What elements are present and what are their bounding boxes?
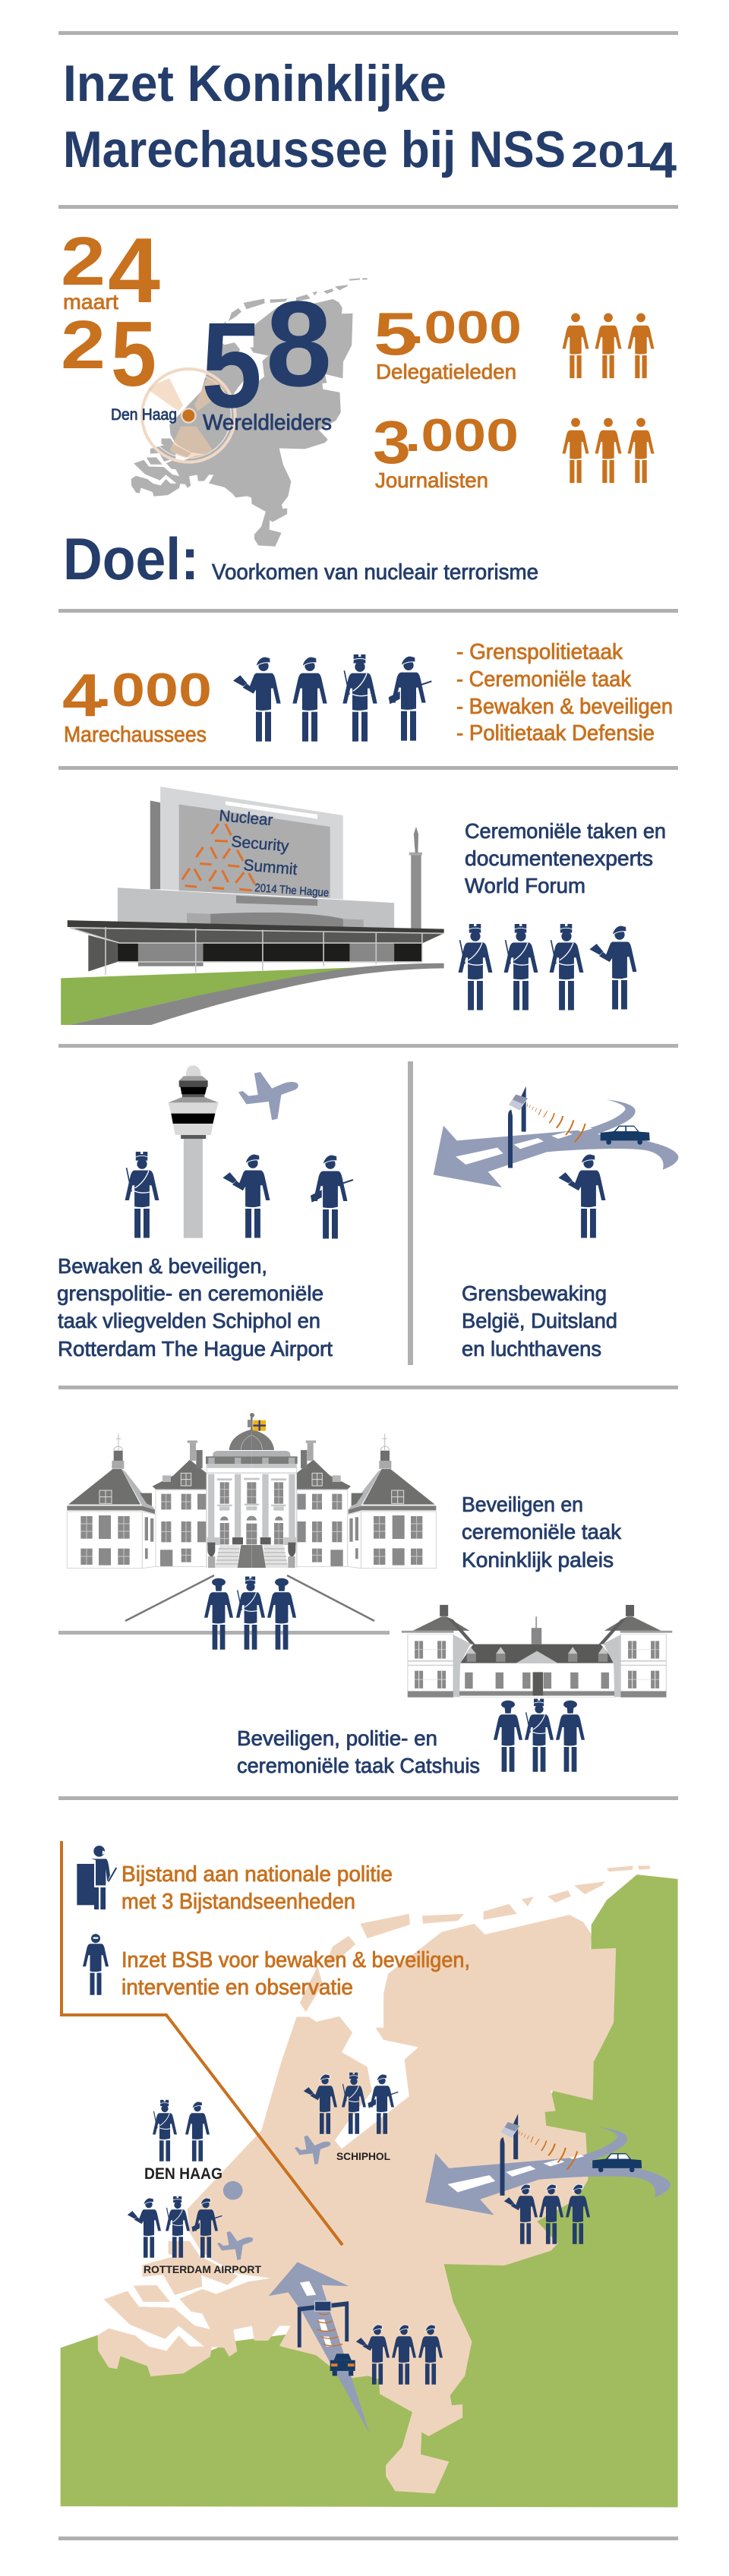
text: World Forum: documentenexperts <box>465 847 653 870</box>
text: BSB: Inzet BSB voor bewaken & beveiligen, <box>122 1948 470 1972</box>
icon: border marechaussee <box>558 1154 605 1238</box>
goal heading and text: Voorkomen van nucleair terrorisme <box>212 560 538 585</box>
dates: 4 <box>108 219 160 322</box>
task list: - Politietaak Defensie <box>456 721 655 746</box>
dates <box>61 219 160 405</box>
stat: 4.000 Marechaussees: Marechaussees <box>64 723 207 747</box>
stat: journalisten: 3 <box>373 408 411 476</box>
illustration: control tower <box>169 1065 219 1238</box>
map: Netherlands grey with radiation symbol <box>131 278 368 547</box>
icon: four marechaussees <box>233 654 431 742</box>
text: airports: taak vliegvelden Schiphol en <box>58 1309 320 1332</box>
icon: car front <box>330 2354 355 2376</box>
group: Den Haag <box>144 2100 222 2183</box>
logo text: Nuclear Security Summit: 2014 The Hague <box>254 881 330 900</box>
icon: plane <box>238 1072 298 1120</box>
stat: delegatieleden: 5 <box>374 300 418 367</box>
text: BSB: interventie en observatie <box>122 1975 353 2000</box>
illustration: Catshuis <box>402 1605 672 1698</box>
label: Den Haag: Den Haag <box>111 406 177 424</box>
task list: - Ceremoniële taak <box>456 667 631 692</box>
goal heading and text <box>63 525 538 592</box>
stat: 4.000 Marechaussees: 4 <box>62 661 103 729</box>
icon: airport marechaussees <box>125 1152 353 1239</box>
icon: eastern border marechaussees <box>504 2184 590 2244</box>
icon: royal flag <box>253 1420 266 1431</box>
title: 4 <box>649 132 677 189</box>
stat: 4.000 Marechaussees: .000 <box>95 664 212 717</box>
text: nationale politie <box>122 1862 393 1914</box>
illustration: royal palace <box>67 1413 436 1569</box>
bottom rule <box>58 2537 678 2540</box>
text: World Forum: Ceremoniële taken en <box>465 819 666 843</box>
number: 58 Wereldleiders: Wereldleiders <box>203 411 332 435</box>
icon: radiation symbol <box>142 369 235 462</box>
title <box>63 55 677 189</box>
map: deployment across the Netherlands <box>61 1866 678 2507</box>
title: Marechaussee bij NSS <box>63 121 566 178</box>
text: airports: Bewaken & beveiligen, <box>58 1254 267 1278</box>
text: border control <box>462 1282 617 1361</box>
number: 58 Wereldleiders: 8 <box>266 276 332 411</box>
text: airports: grenspolitie- en ceremoniële <box>57 1282 323 1305</box>
goal heading and text: Doel: <box>63 525 199 592</box>
text: palace: Koninklijk paleis <box>462 1548 614 1572</box>
group: Rotterdam Airport <box>128 2196 261 2275</box>
illustration: eastern border road <box>425 2114 671 2215</box>
text: Catshuis: ceremoniële taak Catshuis <box>237 1754 480 1777</box>
group: Rotterdam Airport: ROTTERDAM AIRPORT <box>144 2263 261 2275</box>
task list: - Grenspolitietaak <box>456 640 623 664</box>
stat: journalisten: Journalisten <box>375 468 488 492</box>
icon: ceremonial guards and document expert <box>459 924 636 1011</box>
logo text: Nuclear Security Summit <box>219 807 330 900</box>
text: border control: Grensbewaking <box>462 1282 607 1305</box>
stat: delegatieleden: Delegatieleden <box>376 360 516 383</box>
callout frame line <box>62 1841 342 2245</box>
rule under title <box>58 205 678 209</box>
group: Den Haag: DEN HAAG <box>144 2165 222 2183</box>
logo text: Nuclear Security Summit: Summit <box>243 856 298 878</box>
palace sight lines <box>125 1575 374 1621</box>
stat: journalisten <box>373 408 519 492</box>
logo text: Nuclear Security Summit: Nuclear <box>219 807 273 829</box>
rule <box>58 1044 678 1048</box>
illustration: World Forum building <box>61 787 444 1025</box>
top rule <box>58 31 678 35</box>
rule <box>58 609 678 613</box>
rule <box>58 1796 678 1800</box>
text: border control: en luchthavens <box>462 1337 601 1361</box>
dates: 5 <box>111 302 156 405</box>
vertical divider <box>408 1061 413 1365</box>
text: nationale politie: met 3 Bijstandseenheden <box>122 1890 355 1914</box>
number: 58 Wereldleiders <box>201 276 332 435</box>
icon: riot police with shield <box>77 1846 116 1909</box>
stat: delegatieleden: .000 <box>408 302 522 353</box>
rule <box>58 766 678 770</box>
rule: half width <box>58 1631 390 1635</box>
group: Schiphol: SCHIPHOL <box>336 2150 390 2162</box>
title: Inzet Koninklijke <box>63 55 447 112</box>
icon: Catshuis guards <box>494 1698 585 1772</box>
dates: 2 <box>61 224 106 300</box>
stat: delegatieleden <box>374 300 522 383</box>
illustration: border road with camera and car <box>434 1086 678 1187</box>
number: 58 Wereldleiders: 5 <box>201 297 262 433</box>
group: Schiphol <box>295 2073 398 2165</box>
dates: 2 <box>61 307 106 383</box>
icon: southern border marechaussees <box>356 2325 443 2385</box>
stat: journalisten: .000 <box>405 410 519 461</box>
text: border control: België, Duitsland <box>462 1309 617 1332</box>
text: airports: Rotterdam The Hague Airport <box>58 1337 333 1361</box>
logo text: Nuclear Security Summit: Security <box>231 833 290 856</box>
icon: three journalists <box>563 418 654 483</box>
text: Catshuis: Beveiligen, politie- en <box>237 1726 437 1750</box>
title: 201 <box>571 135 652 175</box>
text: World Forum <box>465 819 666 897</box>
text: World Forum: World Forum <box>465 874 585 897</box>
text: palace: ceremoniële taak <box>462 1520 622 1543</box>
text: Catshuis <box>237 1726 480 1777</box>
task list: - Bewaken & beveiligen <box>456 695 673 719</box>
text: nationale politie: Bijstand aan nationale politie <box>122 1862 393 1887</box>
icon: three delegates <box>563 314 654 378</box>
stat: 4.000 Marechaussees <box>62 661 212 747</box>
text: airports <box>57 1254 333 1361</box>
icon: BSB officer <box>83 1934 109 1995</box>
dates: maart <box>63 290 118 314</box>
text: palace: Beveiligen en <box>462 1493 583 1516</box>
rule <box>58 1386 678 1389</box>
text: palace <box>462 1493 622 1572</box>
text: BSB <box>122 1948 470 2000</box>
task list <box>456 640 673 746</box>
illustration: southern border road with gantry <box>269 2262 370 2434</box>
icon: palace guards <box>204 1576 296 1650</box>
